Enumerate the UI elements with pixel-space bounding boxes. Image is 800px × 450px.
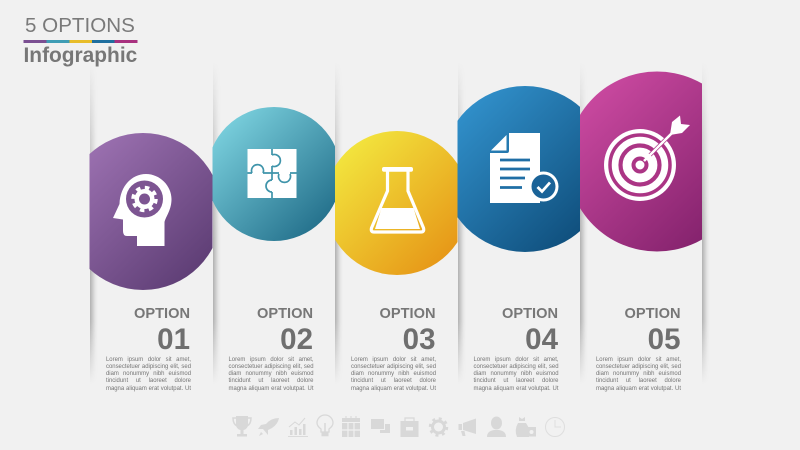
option 5 body text [596,356,681,392]
option 4 body text: magna aliquam erat volutpat. Ut [474,386,558,392]
icon: flask [371,167,424,232]
option 4 label: OPTION [502,306,558,322]
option 5 body text: consectetuer adipiscing elit, sed [596,364,681,370]
icon: gear [430,418,447,436]
option 1 number: 01 [157,322,190,356]
icon: briefcase [400,418,418,437]
option 3 body text: diam nonummy nibh euismod [351,371,436,377]
title: Infographic: Infographic [24,44,137,67]
icon: rocket [258,418,279,436]
icon: clock [546,418,564,436]
icon: trophy [233,416,251,436]
panel divider shadows [90,80,708,376]
option 3 body text: Lorem ipsum dolor sit amet, [351,357,436,363]
circle 1: purple [90,133,212,290]
option 1 label: OPTION [134,306,190,322]
icon: money bag and camera [516,417,536,437]
option 2 body text [228,356,314,392]
option 2 body text: tincidunt ut laoreet dolore [228,378,314,384]
option 2 body text: Lorem ipsum dolor sit amet, [228,357,314,363]
option 5 body text: magna aliquam erat volutpat. Ut [596,386,681,392]
panel 2 text [228,306,314,392]
option 3 body text: magna aliquam erat volutpat. Ut [351,386,436,392]
option 4 body text [474,356,558,392]
option 1 body text: tincidunt ut laoreet dolore [106,378,191,384]
title colour rule [24,40,138,43]
option 4 body text: Lorem ipsum dolor sit amet, [474,357,558,363]
option 3 body text [351,356,436,392]
option 1 body text [106,356,191,392]
icon: calendar [342,416,360,437]
circles, icons and title rule [24,40,702,437]
option 5 number: 05 [648,322,680,356]
option 2 body text: diam nonummy nibh euismod [228,371,314,377]
option 5 body text: tincidunt ut laoreet dolore [596,378,681,384]
option 2 body text: consectetuer adipiscing elit, sed [228,364,314,370]
option 1 body text: diam nonummy nibh euismod [106,371,191,377]
option 2 number: 02 [280,322,313,356]
option 4 body text: tincidunt ut laoreet dolore [474,378,558,384]
option 5 label: OPTION [625,306,680,322]
title: 5 OPTIONS: 5 OPTIONS [25,14,135,37]
panel 1 text [106,306,191,392]
option 2 body text: magna aliquam erat volutpat. Ut [228,386,314,392]
option 2 label: OPTION [257,306,313,322]
option 1 body text: Lorem ipsum dolor sit amet, [106,357,191,363]
icon: light bulb [317,415,333,436]
icon: person [487,416,506,437]
icon: chat bubbles [371,419,390,433]
option 4 body text: diam nonummy nibh euismod [474,371,558,377]
circle 2: teal [207,107,341,241]
option 5 body text: Lorem ipsum dolor sit amet, [596,357,681,363]
option 3 number: 03 [403,322,436,356]
panel 5 text [596,306,681,392]
panel 3 text [351,306,436,392]
option 3 body text: consectetuer adipiscing elit, sed [351,364,436,370]
option 1 body text: consectetuer adipiscing elit, sed [106,364,191,370]
panel 4 text [474,306,558,392]
icon: puzzle [248,149,296,198]
option 3 body text: tincidunt ut laoreet dolore [351,378,436,384]
option 4 body text: consectetuer adipiscing elit, sed [474,364,558,370]
icon: document with check [490,133,558,203]
option 3 label: OPTION [380,306,436,322]
option 1 body text: magna aliquam erat volutpat. Ut [106,386,191,392]
option 4 number: 04 [525,322,558,356]
circle 3: yellow [335,131,458,275]
icon: megaphone [458,418,476,436]
icon: head with gear [113,174,172,246]
circle 5: magenta [580,72,702,252]
circle 4: blue [458,86,580,252]
icon: target with arrow [604,116,690,201]
option 5 body text: diam nonummy nibh euismod [596,371,681,377]
icon: chart [288,418,308,437]
icon row [233,415,564,437]
